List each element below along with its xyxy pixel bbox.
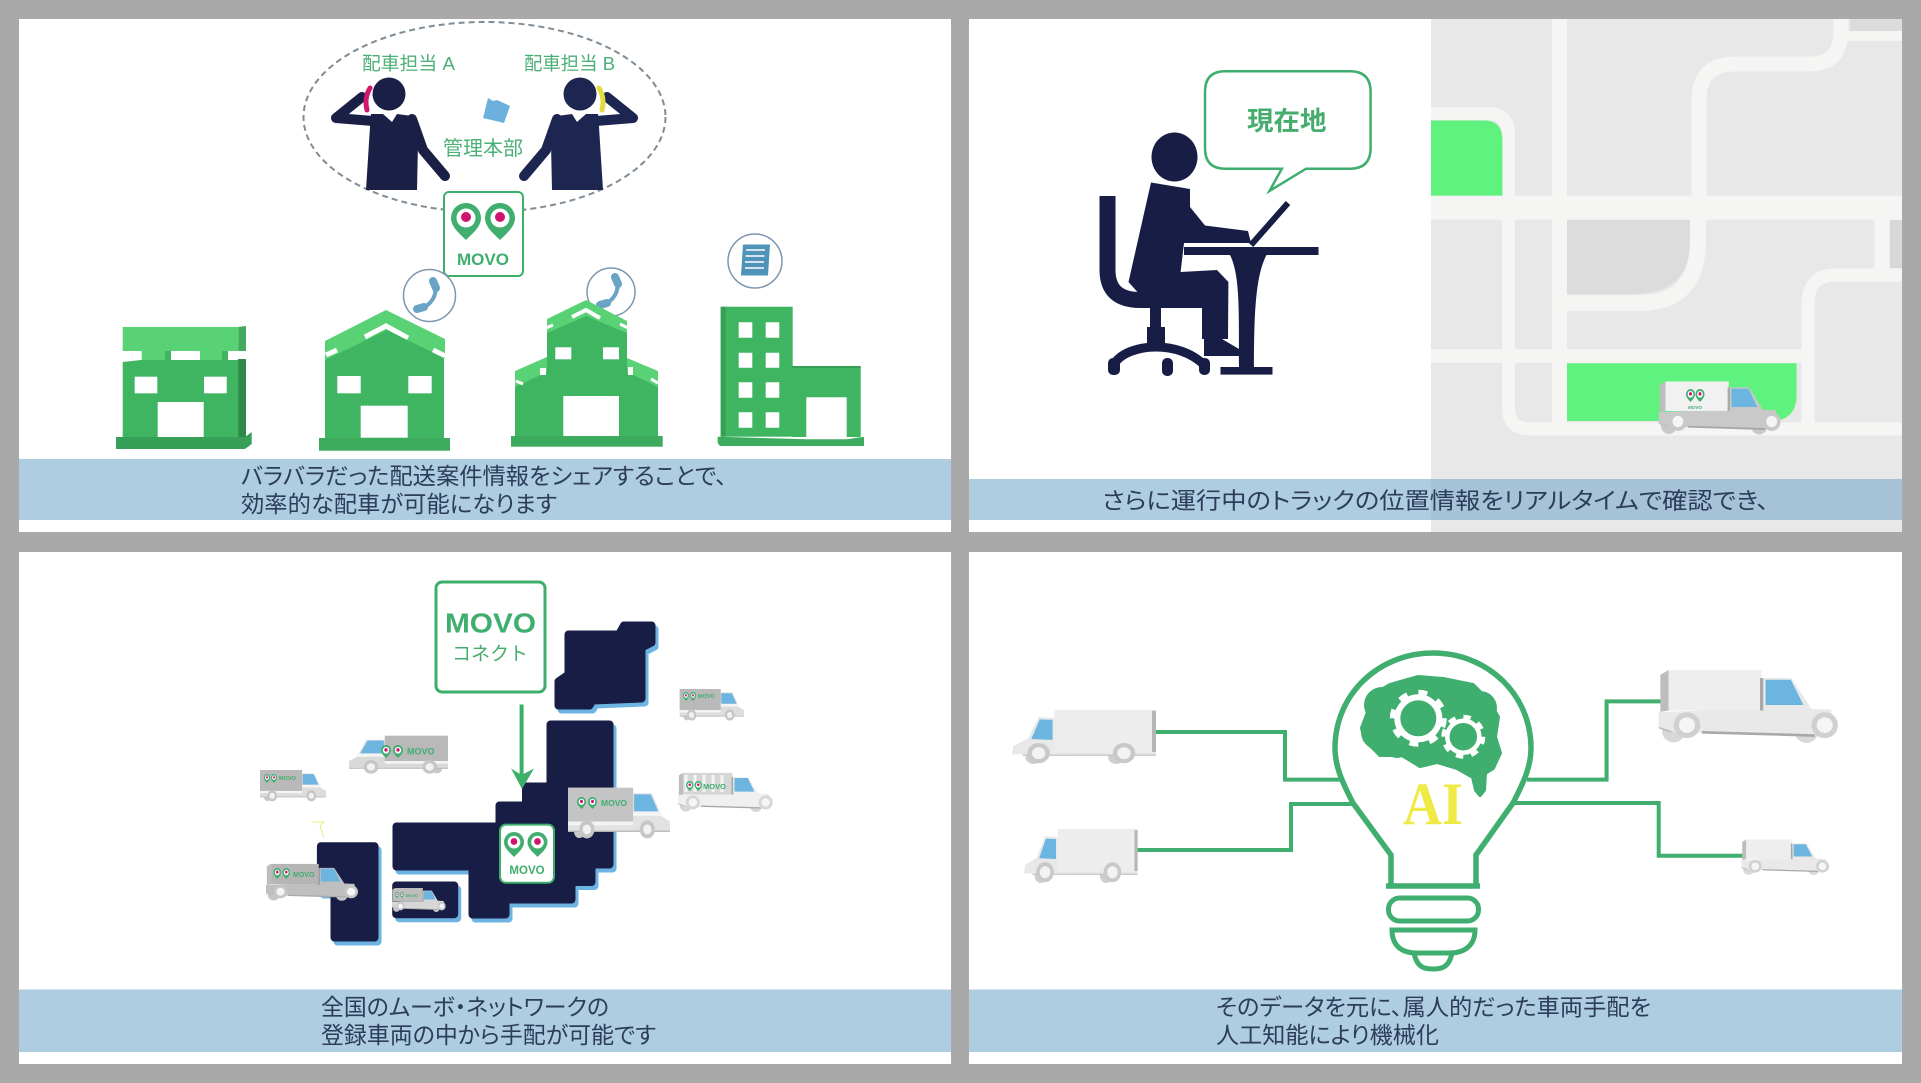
truck left top xyxy=(1012,710,1156,764)
caption bar: 全国のムーボ・ネットワークの xyxy=(321,994,609,1020)
AI text: AI xyxy=(1403,771,1463,837)
icon: phone 1 xyxy=(404,270,456,322)
panel: nationwide network xyxy=(19,552,951,1064)
panel: shared dispatch information xyxy=(19,19,951,532)
truck on map xyxy=(1659,382,1781,434)
caption bar xyxy=(19,990,951,1052)
caption bar xyxy=(969,990,1902,1052)
arrow xyxy=(511,704,534,789)
truck 4: MOVO xyxy=(703,782,726,791)
caption bar xyxy=(969,479,1902,520)
building 3 xyxy=(511,300,663,447)
person: dispatcher B xyxy=(524,78,633,190)
building 2 xyxy=(319,310,450,451)
light bulb with AI brain xyxy=(1335,653,1531,969)
panel: real-time location xyxy=(969,19,1902,532)
icon: document xyxy=(728,234,782,288)
truck 6: MOVO xyxy=(293,872,315,879)
yellow spark xyxy=(312,822,324,838)
truck 4 xyxy=(678,773,773,812)
MOVO app box: MOVO xyxy=(457,251,509,269)
MOVO app box on map xyxy=(500,825,554,883)
MOVO Connect box: コネクト xyxy=(452,643,528,665)
brain xyxy=(1361,676,1500,795)
truck right top xyxy=(1659,670,1838,743)
truck left bottom xyxy=(1024,829,1138,883)
truck 2 xyxy=(260,770,326,801)
label: dispatcher A: 配車担当 A xyxy=(362,53,456,74)
connector lines xyxy=(1135,701,1746,856)
icon: folder xyxy=(483,98,510,123)
truck 3: MOVO xyxy=(698,694,716,700)
caption bar: 人工知能により機械化 xyxy=(1216,1022,1439,1048)
truck 5 xyxy=(568,788,670,838)
caption bar: 登録車両の中から手配が可能です xyxy=(321,1022,656,1048)
truck 2: MOVO xyxy=(279,776,297,782)
caption bar xyxy=(19,459,951,520)
label: dispatcher B: 配車担当 B xyxy=(524,53,615,74)
truck 7: MOVO xyxy=(406,893,418,898)
head office dashed ellipse xyxy=(304,22,666,212)
truck right bottom xyxy=(1741,840,1829,875)
caption bar: バラバラだった配送案件情報をシェアすることで、 xyxy=(241,463,727,489)
person: dispatcher A xyxy=(336,78,445,190)
truck 3 xyxy=(680,689,744,721)
person at desk xyxy=(1108,132,1318,376)
MOVO app box on map: MOVO xyxy=(509,865,545,877)
building 1 xyxy=(116,326,252,449)
caption bar: さらに運行中のトラックの位置情報をリアルタイムで確認でき、 xyxy=(1102,488,1769,514)
panel: AI dispatch xyxy=(969,552,1902,1064)
caption bar: 効率的な配車が可能になります xyxy=(241,491,557,517)
truck 7 xyxy=(392,888,446,912)
speech bubble xyxy=(1205,71,1371,191)
speech bubble: 現在地 xyxy=(1247,106,1326,136)
MOVO app box xyxy=(444,192,523,276)
MOVO Connect box: MOVO xyxy=(445,608,536,638)
truck 1 xyxy=(349,736,448,774)
road map xyxy=(1431,19,1902,532)
gears xyxy=(1392,692,1483,757)
truck 6 xyxy=(266,864,358,901)
caption bar: そのデータを元に、属人的だった車両手配を xyxy=(1216,994,1651,1020)
icon: phone 2 xyxy=(587,268,635,316)
building 4 xyxy=(718,307,864,446)
MOVO Connect box xyxy=(436,582,545,692)
label: head office: 管理本部 xyxy=(443,137,523,160)
truck on map: MOVO xyxy=(1688,405,1702,410)
truck 1: MOVO xyxy=(407,746,435,756)
truck 5: MOVO xyxy=(601,798,627,808)
map of Japan xyxy=(321,626,654,942)
